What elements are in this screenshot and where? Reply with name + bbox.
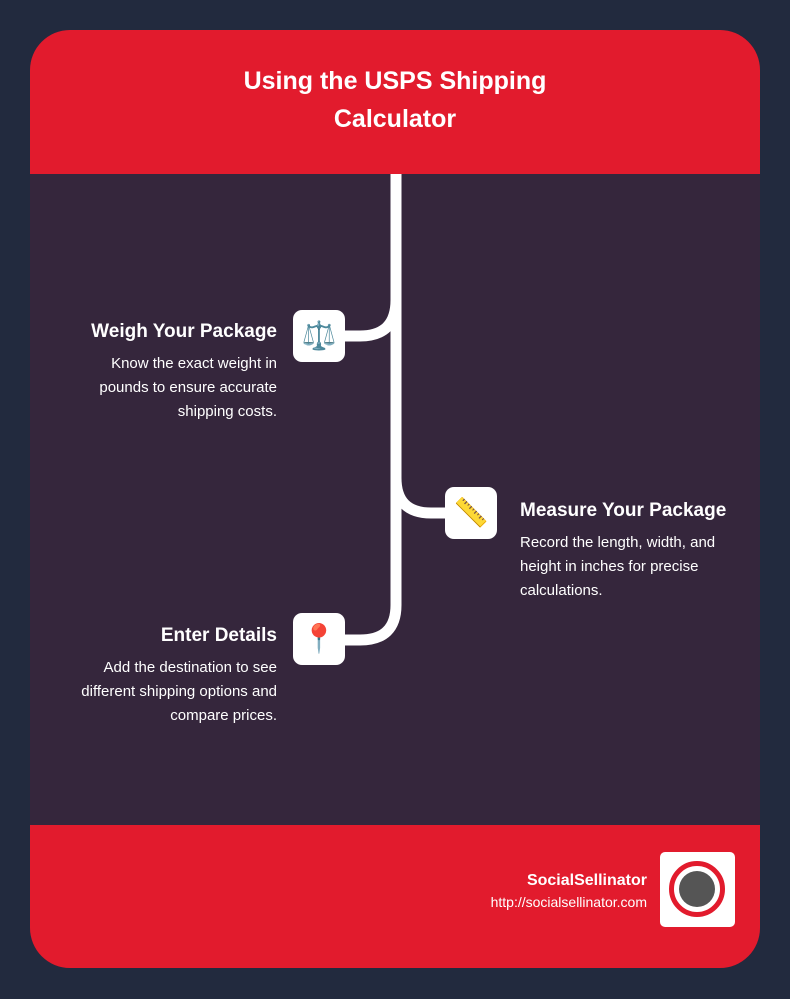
step: measure <box>520 500 726 599</box>
header title: Using the USPS Shipping <box>244 67 546 95</box>
step: weigh: Weigh Your Package <box>91 321 277 342</box>
icon: pin: 📍 <box>302 623 336 654</box>
brand text <box>491 872 647 910</box>
header title <box>30 30 760 174</box>
step: measure: Measure Your Package <box>520 500 726 521</box>
icon: scale <box>293 310 345 362</box>
step: enter details: Add the destination to see different shipping options and compare prices. <box>81 659 277 724</box>
step: weigh: Know the exact weight in pounds to ensure accurate shipping costs. <box>99 355 277 420</box>
step: weigh <box>91 321 277 420</box>
header title: Calculator <box>334 105 456 133</box>
footer <box>30 825 760 968</box>
icon: ruler <box>445 487 497 539</box>
icon: scale: ⚖️ <box>302 320 336 351</box>
icon: pin <box>293 613 345 665</box>
step: enter details <box>81 625 277 724</box>
step: enter details: Enter Details <box>161 625 277 646</box>
brand text: SocialSellinator <box>527 872 647 889</box>
icon: ruler: 📏 <box>454 497 488 528</box>
brand text: http://socialsellinator.com <box>491 894 647 910</box>
logo <box>660 852 735 927</box>
step: measure: Record the length, width, and height in inches for precise calculations. <box>520 534 715 599</box>
